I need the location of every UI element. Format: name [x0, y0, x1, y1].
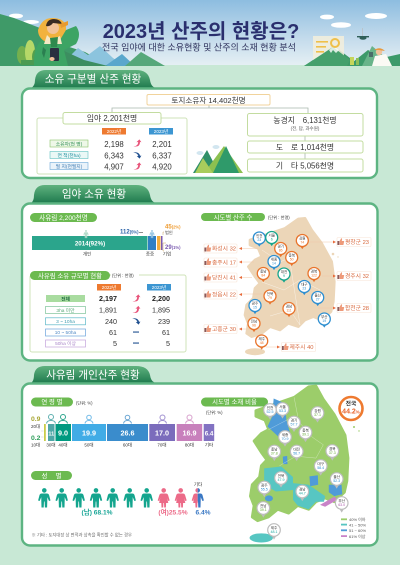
header illustration banner [0, 0, 400, 70]
pins: 74 [300, 240, 304, 244]
pins: 23 [257, 238, 261, 242]
pins: 전북 [278, 473, 285, 478]
callouts: top cities: 경주시 32 [345, 273, 369, 280]
row: 3-10ha: 240 [105, 317, 117, 326]
farmland box: (전, 답, 과수원) [291, 125, 320, 132]
row: 10-50ha: 61 [162, 328, 170, 337]
row: owners [50, 139, 172, 149]
regional location pill: (단위: %) [206, 409, 223, 416]
section tab: 소유 구분별 산주 현황 [45, 74, 142, 86]
pins: 70.9 [282, 437, 288, 441]
row: parcels: 4,920 [152, 162, 172, 171]
pins: 23 [302, 286, 306, 290]
pins: 9 [283, 274, 285, 278]
pins: 대구 [301, 282, 308, 286]
pins: 63.0 [338, 503, 345, 507]
pins: 충남 [271, 446, 278, 452]
gender pill [31, 471, 72, 480]
pins: 48 [260, 341, 264, 345]
map legend: 51 ~ 60% [349, 528, 366, 533]
callouts: top cities: 화성시 32 [212, 245, 236, 253]
pins: 52.3 [333, 479, 340, 483]
age bar chart: 0.9 [31, 416, 41, 423]
icon: mountains [193, 145, 243, 173]
row: 3-10ha: 239 [158, 317, 170, 326]
year tag 2023 [147, 284, 171, 290]
pins: 15 [253, 306, 257, 310]
row: parcels: 4,907 [104, 162, 124, 171]
year tag 2023: 2023년 [154, 128, 168, 134]
pins: 52.5 [266, 410, 274, 414]
year tag 2023 [149, 128, 173, 134]
road box: 도 로 1,014천명 [276, 142, 334, 152]
row: total [46, 294, 170, 303]
pins: 79 [268, 296, 272, 300]
callouts: top cities [204, 238, 371, 352]
pins: 56.7 [293, 452, 300, 456]
year tag 2022 [97, 284, 121, 290]
age bar chart: 80대 [185, 442, 194, 448]
pins: 37.8 [271, 452, 278, 456]
row: owners: 2,201 [152, 140, 172, 149]
subtitle: 전국 임야에 대한 소유현황 및 산주의 소재 현황 분석 [102, 42, 296, 52]
pins: 48.1 [270, 530, 278, 534]
section tab [31, 185, 156, 203]
age bar chart: 40대 [58, 442, 68, 448]
panel: ownership section [22, 70, 377, 178]
section tab [31, 366, 156, 383]
landowner box: 토지소유자 14,402천명 [171, 95, 246, 105]
pins: 27 [316, 298, 320, 302]
age bar chart: 6.4 [205, 430, 214, 438]
section tab [31, 70, 156, 88]
pins: 충북 [302, 428, 309, 432]
row: parcels [50, 162, 172, 171]
pins: 경북 [311, 268, 318, 274]
pins: 37.1 [314, 413, 321, 417]
size table pill: (단위 : 천명) [112, 272, 134, 279]
stacked ownership bar [32, 224, 181, 258]
national share badge [340, 397, 362, 420]
pins: 광주 [261, 482, 268, 488]
pins: 대전 [281, 269, 287, 274]
callouts: top cities: 정읍시 22 [212, 292, 236, 299]
pins: 인천 [256, 233, 263, 238]
icon: surveyor person [369, 48, 392, 66]
gender pictogram: (여)25.5% [158, 508, 188, 516]
pins: 53.3 [279, 409, 286, 413]
age pill: (단위: %) [76, 400, 93, 406]
pins: 경기 [277, 244, 284, 248]
map legend: 40% 이하 [349, 516, 366, 522]
age bar chart: 기타 [205, 442, 214, 448]
pins: 111 [286, 308, 292, 312]
pins: 전남 [251, 318, 258, 324]
row: under 3ha [46, 306, 170, 314]
pins: 인천 [267, 405, 273, 410]
row: under 3ha: 3ha 미만 [56, 307, 75, 314]
age bar chart: 16.9 [182, 428, 196, 438]
pins: 44.7 [299, 492, 306, 496]
pins: 58.4 [317, 466, 324, 470]
pins: 86 [279, 248, 283, 252]
row: over 50ha [46, 339, 170, 348]
footnote: ※ 기타 : 토지대장 상 면적과 상속을 확인할 수 없는 경우 [32, 532, 132, 538]
row: area: 6,337 [152, 151, 172, 160]
map: owners by region [242, 218, 339, 355]
row: total: 2,197 [99, 294, 117, 303]
pins: 14 [272, 262, 276, 266]
pins: 경기 [291, 418, 297, 422]
pins: 전북 [267, 291, 274, 296]
stacked ownership bar: 종중 [146, 252, 154, 256]
stacked ownership bar: 기업 [163, 250, 171, 258]
gender pill: 성 별 [42, 471, 62, 480]
year tag 2022 [102, 128, 126, 134]
pins: 서울 [268, 232, 276, 238]
year tag 2022: 2022년 [107, 128, 121, 134]
icon: drone [357, 28, 369, 40]
pins: 광주 [252, 300, 259, 306]
callouts: top cities: 고흥군 30 [212, 325, 236, 333]
pins: 39.1 [302, 432, 309, 436]
pins: 39.1 [260, 508, 267, 512]
age pill [31, 397, 93, 406]
icon: map card with pin [304, 36, 350, 66]
pins: 경남 [299, 486, 306, 492]
forest box: 임야 2,201천명 [87, 113, 137, 123]
age bar chart [31, 414, 214, 448]
pins: 경북 [329, 446, 336, 451]
row: 3-10ha [46, 317, 170, 326]
map legend: 61% 이상 [349, 533, 366, 539]
pins: 대전 [293, 446, 300, 452]
stacked ownership bar: 2014(92%) [75, 240, 105, 248]
pins [248, 232, 330, 350]
stacked ownership bar: 45(2%) [165, 224, 181, 230]
row: 10-50ha: 61 [109, 328, 117, 337]
age bar chart: 0.2 [31, 435, 41, 442]
row: under 3ha: 1,895 [152, 306, 170, 314]
age bar chart: 30대 [46, 442, 56, 448]
row: area: 면 적(천ha) [57, 152, 81, 159]
age bar chart: 50대 [84, 442, 94, 448]
age bar chart: 17.0 [155, 428, 169, 438]
private forest pill: 사유림 2,200천명 [39, 213, 88, 222]
regional location pill [201, 397, 268, 416]
age bar chart: 26.6 [120, 428, 134, 438]
panel: individual owner section [22, 366, 378, 546]
road box [248, 141, 363, 153]
map legend: 41 ~ 50% [349, 522, 366, 527]
pins: 부산 [338, 498, 346, 503]
pins [257, 403, 348, 540]
age bar chart: 10대 [31, 442, 40, 448]
section tab: 사유림 개인산주 현황 [46, 370, 140, 382]
national share badge: 전국 [346, 400, 357, 408]
callouts: top cities: 합천군 28 [345, 304, 369, 312]
farmland box: 농경지 6,131천명 [273, 115, 337, 125]
pins: 제주 [258, 336, 266, 341]
forest box [63, 112, 161, 124]
pins: 강원 [299, 236, 306, 240]
pins: 19 [322, 319, 326, 323]
regional owner count pill: 시도별 산주 수 [214, 212, 253, 221]
stacked ownership bar: 개인 [83, 250, 91, 258]
stacked ownership bar: 112(5%) [120, 230, 139, 236]
pins: 강원 [314, 408, 321, 413]
regional owner count pill: (단위 : 천명) [268, 214, 290, 221]
icon: small tree [350, 57, 359, 65]
row: over 50ha: 50ha 이상 [55, 340, 76, 347]
row: area [50, 151, 172, 160]
callouts: top cities: 제주시 40 [289, 343, 314, 351]
age person icons [46, 414, 194, 424]
year tag 2022: 2022년 [102, 284, 116, 290]
row: owners: 2,198 [104, 140, 124, 149]
age pill: 연 령 별 [41, 397, 63, 406]
icon: trees [17, 40, 40, 65]
pins: 122 [311, 274, 317, 278]
pins: 세종 [271, 256, 278, 262]
row: parcels: 필 지(천필지) [56, 163, 83, 170]
landowner box [147, 94, 270, 105]
pins: 37.3 [329, 451, 336, 455]
stacked ownership bar: 법인 [165, 229, 173, 235]
stacked ownership bar: 29(1%) [165, 245, 181, 251]
row: over 50ha: 5 [113, 339, 117, 348]
pins: 세종 [282, 432, 289, 437]
pins: 47.9 [278, 478, 284, 482]
row: total: 전체 [61, 295, 70, 302]
age bar chart: 70대 [157, 442, 167, 448]
pins: 울산 [314, 292, 322, 298]
pins: 96 [252, 324, 256, 328]
gender pictogram: 6.4% [195, 510, 211, 516]
pins: 대구 [317, 461, 325, 466]
row: under 3ha: 1,891 [99, 306, 117, 314]
pins: 6 [271, 238, 273, 242]
callouts: top cities: 충주시 17 [212, 258, 236, 266]
age bar chart: 60대 [123, 442, 132, 448]
row: owners: 소유자(천 명) [56, 140, 83, 147]
section tab: 임야 소유 현황 [62, 188, 126, 200]
icon: person with tablet [34, 18, 79, 66]
row: 10-50ha: 10 ~ 50ha [55, 330, 77, 336]
row: total: 2,200 [152, 294, 170, 303]
pins: 충남 [260, 268, 267, 274]
row: area: 6,343 [104, 151, 124, 160]
national share badge: 44.2% [342, 408, 360, 416]
map legend [341, 516, 366, 539]
age bar chart: 11 [48, 431, 54, 437]
row: 10-50ha [46, 328, 170, 337]
callouts: top cities: 평창군 23 [345, 238, 369, 246]
pins: 57.7 [290, 422, 298, 426]
size table pill [30, 271, 139, 280]
size table pill: 사유림 소유 규모별 현황 [38, 271, 102, 280]
private forest pill [30, 213, 97, 222]
pins: 50 [290, 258, 294, 262]
row: 3-10ha: 3 ~ 10ha [56, 319, 75, 325]
pins: 55.5 [261, 488, 268, 492]
map: location share by region [250, 386, 360, 542]
other box: 기 타 5,056천명 [276, 160, 334, 170]
gender pictogram: 기타 [194, 481, 203, 488]
age bar chart: 9.0 [58, 428, 68, 438]
pins: 제주 [271, 525, 278, 530]
pins: 서울 [279, 404, 286, 409]
farmland box [248, 114, 363, 136]
age bar chart: 19.9 [82, 428, 96, 438]
panel: forest ownership section [22, 185, 378, 360]
other box [248, 159, 363, 172]
regional location pill: 시도별 소재 비율 [212, 397, 257, 406]
row: over 50ha: 5 [166, 339, 170, 348]
callout lines [242, 242, 335, 347]
callouts: top cities: 당진시 41 [212, 274, 236, 282]
age bar chart: 20대 [31, 423, 40, 430]
pins: 울산 [333, 474, 341, 479]
regional owner count pill [201, 212, 290, 221]
gender pictogram [38, 481, 211, 516]
title: 2023년 산주의 현황은? [103, 20, 299, 43]
pins: 충북 [288, 252, 296, 258]
pins: 전남 [260, 503, 267, 508]
pins: 경남 [286, 304, 293, 308]
gender pictogram: (남) 68.1% [82, 508, 113, 516]
pins: 부산 [321, 314, 328, 319]
year tag 2023: 2023년 [152, 284, 166, 290]
pins: 84 [261, 274, 265, 278]
